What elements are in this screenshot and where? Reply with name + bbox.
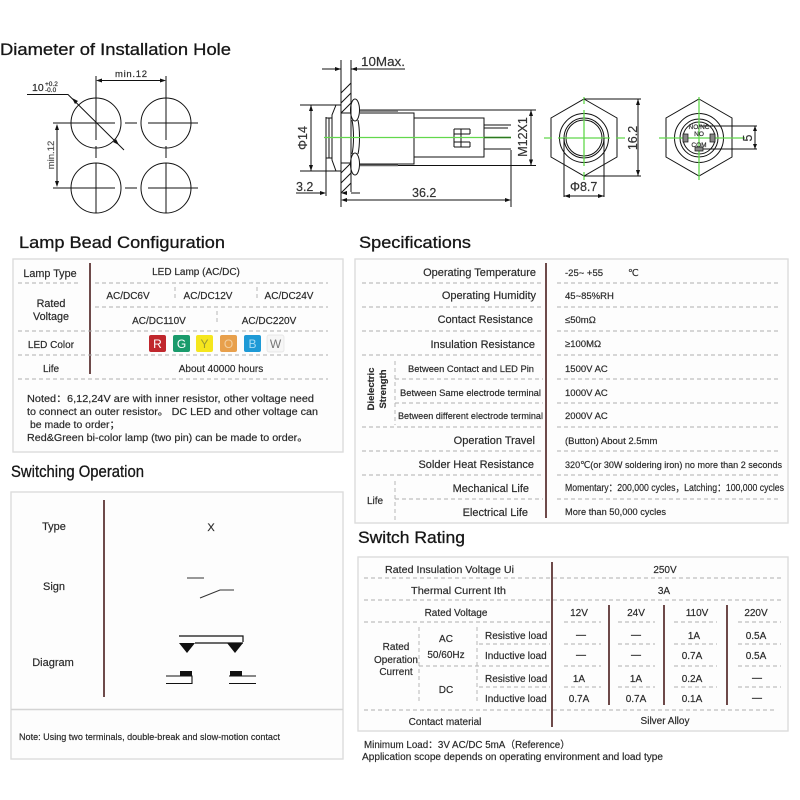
text block: lamp notes: Red&Green bi-color lamp (two pin) can be made to order。 xyxy=(27,433,308,444)
row: AC inductive load: Inductive load xyxy=(485,651,547,662)
row values: specifications: 1500V AC xyxy=(565,364,608,375)
row labels: specifications: Between different electrode terminal xyxy=(398,411,543,422)
diagram: side view of switch: 36.2 xyxy=(412,186,436,200)
heading: lamp bead configuration: Lamp Bead Configuration xyxy=(19,233,225,252)
row labels: specifications xyxy=(398,267,543,519)
row: rated voltage: 24V xyxy=(627,608,645,619)
group label: DC: DC xyxy=(439,685,453,696)
row: rated insulation voltage xyxy=(385,565,677,576)
group label: life: Life xyxy=(367,496,384,507)
group label: dielectric strength: Strength xyxy=(378,369,389,409)
row: AC resistive load: 1A xyxy=(688,631,700,642)
row: lamp type: Lamp Type xyxy=(23,268,77,280)
row: rated voltage: AC/DC24V xyxy=(265,291,314,302)
row: AC resistive load xyxy=(485,630,767,642)
row: LED colour: G xyxy=(177,337,186,351)
row values: specifications xyxy=(565,268,784,518)
row: LED colour: LED Color xyxy=(28,340,75,351)
group label: dielectric strength xyxy=(366,368,389,410)
row: contact material xyxy=(409,716,689,728)
diagram: rear view of switch: COM xyxy=(691,142,707,149)
row: DC resistive load: 1A xyxy=(573,674,585,685)
diagram: rear view of switch xyxy=(659,97,757,180)
row: rated voltage: 220V xyxy=(744,608,768,619)
row: AC inductive load: — xyxy=(576,650,586,661)
row: life xyxy=(43,364,263,375)
row: LED colour: R xyxy=(153,337,162,351)
group label: dielectric strength: Dielectric xyxy=(366,368,377,410)
row: contact material: Silver Alloy xyxy=(641,716,689,727)
diagram: front view of switch: Φ8.7 xyxy=(570,180,597,194)
row labels: specifications: Operation Travel xyxy=(454,435,535,447)
row: DC inductive load: 0.1A xyxy=(682,694,703,705)
diagram: side view of switch: 3.2 xyxy=(296,180,313,194)
row: DC inductive load xyxy=(485,693,762,705)
row: life: About 40000 hours xyxy=(179,364,263,375)
panel: lamp bead configuration xyxy=(13,259,343,452)
row labels: specifications: Mechanical Life xyxy=(453,483,529,495)
row: AC inductive load: 0.5A xyxy=(746,651,767,662)
row: rated voltage: AC/DC220V xyxy=(242,316,297,327)
row labels: specifications: Insulation Resistance xyxy=(430,339,535,351)
row: type xyxy=(42,521,215,534)
row: sign: Sign xyxy=(43,581,65,593)
diagram: installation holes: -0.0 xyxy=(45,87,57,94)
text block: lamp notes: be made to order； xyxy=(30,420,120,431)
group label: rated operation current: Current xyxy=(379,667,413,678)
row: DC resistive load xyxy=(485,673,762,685)
heading: diameter of installation hole: Diameter of Installation Hole xyxy=(0,40,231,59)
row: rated insulation voltage: Rated Insulation Voltage Ui xyxy=(385,565,514,576)
diagram: installation holes xyxy=(27,69,198,213)
row: LED colour: O xyxy=(224,337,233,351)
diagram: side view of switch: 10Max. xyxy=(361,55,405,69)
row: rated voltage: Rated xyxy=(37,298,65,310)
text block: rating notes: Application scope depends on operating environment and load type xyxy=(362,752,663,763)
row: rated voltage: AC/DC110V xyxy=(132,316,186,327)
row: rated voltage: AC/DC6V xyxy=(106,291,150,302)
text block: lamp notes xyxy=(27,394,318,444)
row: rated voltage xyxy=(425,608,768,619)
row: AC resistive load: Resistive load xyxy=(485,631,547,642)
row: diagram xyxy=(32,636,256,684)
row: sign xyxy=(43,578,234,598)
row: LED colour: W xyxy=(270,337,282,351)
row values: specifications: 1000V AC xyxy=(565,388,608,399)
row: LED colour: Y xyxy=(200,337,209,351)
row values: specifications: ≥100MΩ xyxy=(565,339,601,350)
row: diagram: Diagram xyxy=(32,657,74,669)
row: AC inductive load: — xyxy=(631,650,641,661)
diagram: front view of switch xyxy=(544,97,641,198)
row: AC resistive load: — xyxy=(631,630,641,641)
diagram: side view of switch: Φ14 xyxy=(296,126,310,150)
row: lamp type xyxy=(23,267,240,280)
row: rated voltage: 12V xyxy=(570,608,588,619)
row: contact material: Contact material xyxy=(409,717,481,728)
row: rated voltage: 110V xyxy=(686,608,709,619)
row: AC inductive load: 0.7A xyxy=(682,651,703,662)
group label: rated operation current: Operation xyxy=(374,655,418,666)
row: DC inductive load: Inductive load xyxy=(485,694,547,705)
row labels: specifications: Operating Temperature xyxy=(423,267,536,279)
heading: switching operation: Switching Operation xyxy=(11,462,144,481)
group label: rated operation current xyxy=(374,642,418,678)
group label: AC: AC xyxy=(439,634,453,645)
row: lamp type: LED Lamp (AC/DC) xyxy=(152,267,240,278)
row labels: specifications: Electrical Life xyxy=(463,507,528,519)
row: AC inductive load xyxy=(485,650,767,662)
panel: specifications xyxy=(355,259,788,523)
row: AC resistive load: — xyxy=(576,630,586,641)
diagram: installation holes: min.12 xyxy=(46,141,57,169)
row: thermal current xyxy=(411,586,670,597)
heading: switch rating: Switch Rating xyxy=(358,528,465,547)
text block: rating notes: Minimum Load：3V AC/DC 5mA（Reference） xyxy=(364,739,570,751)
row values: specifications: ≤50mΩ xyxy=(565,315,596,326)
row: thermal current: Thermal Current Ith xyxy=(411,586,506,597)
row values: specifications: 320℃(or 30W soldering iron) no more than 2 seconds xyxy=(565,460,782,471)
diagram: side view of switch xyxy=(296,55,536,207)
row: type: Type xyxy=(42,521,66,533)
row labels: specifications: Between Same electrode terminal xyxy=(400,388,541,399)
diagram: rear view of switch: NO/NC xyxy=(689,124,710,131)
text block: rating notes xyxy=(362,739,663,763)
row: rated voltage: Voltage xyxy=(33,311,69,323)
row: rated voltage: Rated Voltage xyxy=(425,608,488,619)
row values: specifications: -25~ +55 xyxy=(565,268,603,279)
panel: switch rating xyxy=(358,557,788,731)
diagram: rear view of switch: NO xyxy=(694,131,704,138)
row: rated voltage: AC/DC12V xyxy=(184,291,233,302)
row: DC resistive load: Resistive load xyxy=(485,674,547,685)
row: LED colour: B xyxy=(248,337,257,351)
diagram: front view of switch: 16.2 xyxy=(626,126,640,150)
group label: AC: 50/60Hz xyxy=(427,650,465,661)
row labels: specifications: Between Contact and LED Pin xyxy=(408,364,534,375)
diagram: side view of switch: M12X1 xyxy=(516,117,530,157)
row: LED colour xyxy=(28,335,284,352)
heading: specifications: Specifications xyxy=(359,233,471,252)
row values: specifications: (Button) About 2.5mm xyxy=(565,436,657,447)
panel: switching operation xyxy=(11,492,343,759)
row: DC inductive load: 0.7A xyxy=(569,694,590,705)
diagram: installation holes: min.12 xyxy=(115,69,147,80)
group label: rated operation current: Rated xyxy=(383,642,409,653)
row: rated insulation voltage: 250V xyxy=(653,565,677,576)
row: rated voltage xyxy=(33,291,314,327)
group label: AC xyxy=(427,634,465,661)
row labels: specifications: Solder Heat Resistance xyxy=(418,459,534,471)
row values: specifications: More than 50,000 cycles xyxy=(565,507,666,518)
text block: switching note: Note: Using two terminals, double-break and slow-motion contact xyxy=(19,732,280,743)
row values: specifications: 45~85%RH xyxy=(565,291,614,302)
row: thermal current: 3A xyxy=(658,586,670,597)
row: life: Life xyxy=(43,364,59,375)
row labels: specifications: Operating Humidity xyxy=(442,290,536,302)
diagram: rear view of switch: 5 xyxy=(741,134,755,141)
row values: specifications: ℃ xyxy=(628,268,639,279)
row: type: X xyxy=(207,522,215,534)
diagram: installation holes: +0.2 xyxy=(45,81,58,88)
row: DC inductive load: — xyxy=(752,693,762,704)
row values: specifications: 2000V AC xyxy=(565,411,608,422)
row: DC resistive load: 1A xyxy=(630,674,642,685)
row: DC inductive load: 0.7A xyxy=(626,694,647,705)
row: DC resistive load: — xyxy=(752,673,762,684)
diagram: installation holes: 10 xyxy=(32,82,44,94)
row labels: specifications: Contact Resistance xyxy=(438,314,533,326)
row: DC resistive load: 0.2A xyxy=(682,674,703,685)
text block: lamp notes: Noted：6,12,24V are with inner resistor, other voltage need xyxy=(27,394,314,405)
row: AC resistive load: 0.5A xyxy=(746,631,767,642)
text block: lamp notes: to connect an outer resistor。 DC LED and other voltage can xyxy=(27,407,318,418)
